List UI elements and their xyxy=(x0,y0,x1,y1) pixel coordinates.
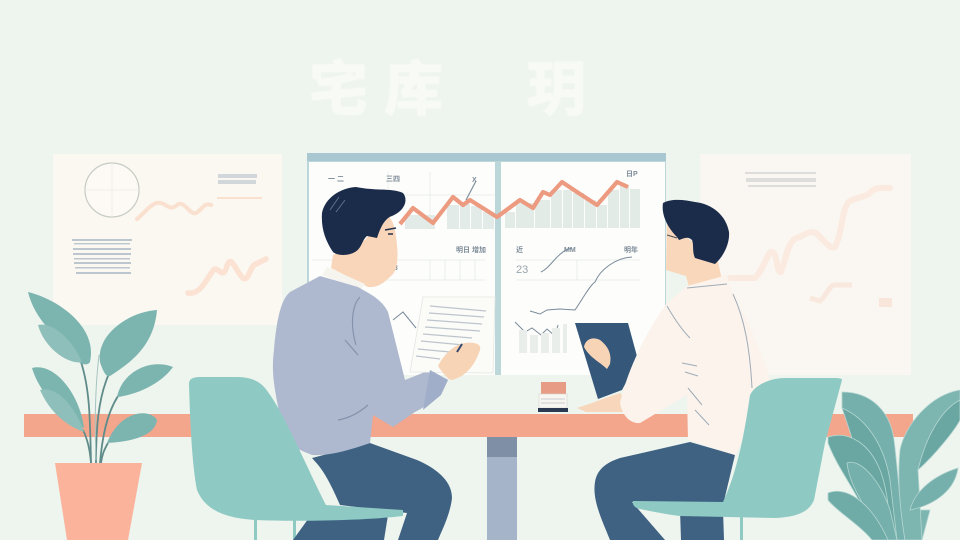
dark line chart left screen xyxy=(393,312,416,328)
trousers xyxy=(594,442,735,540)
torso and arm xyxy=(273,276,448,455)
plant right xyxy=(828,390,960,540)
small chart labels: 28 xyxy=(390,265,398,272)
ear xyxy=(687,240,693,256)
neck and face xyxy=(666,222,722,290)
small chart labels: MM xyxy=(564,247,576,254)
panel: left wall chart xyxy=(53,154,282,325)
screen: left xyxy=(309,162,495,375)
line chart xyxy=(730,188,890,278)
title: 库 xyxy=(384,57,443,123)
chair leg xyxy=(740,516,743,540)
line chart upper xyxy=(137,203,211,219)
small chart labels: 近 xyxy=(516,245,523,254)
leaves xyxy=(28,292,173,443)
text lines block xyxy=(72,239,132,274)
small chart labels: 23 xyxy=(516,264,528,276)
hand over document xyxy=(438,343,480,380)
legend lines upper right xyxy=(217,174,262,199)
far leg xyxy=(293,515,388,540)
small chart labels: X xyxy=(472,177,477,184)
small chart labels: 一 二 xyxy=(328,176,344,183)
hand on tablet xyxy=(584,338,611,369)
glasses xyxy=(667,235,677,238)
small chart labels: 三四 xyxy=(386,175,400,183)
document held by man left xyxy=(410,297,495,380)
marker line to label xyxy=(466,181,476,200)
far leg xyxy=(680,510,724,540)
neck and face xyxy=(331,215,397,287)
small line chart xyxy=(810,285,852,301)
title: 玥 xyxy=(527,57,586,123)
bar chart right xyxy=(505,186,640,228)
man left xyxy=(273,187,452,540)
faint bars lower right screen xyxy=(519,324,567,353)
desk top xyxy=(24,414,913,437)
document text lines xyxy=(416,306,486,359)
title xyxy=(309,57,586,123)
small legend box xyxy=(879,298,892,307)
title: 宅 xyxy=(309,57,368,123)
hair xyxy=(322,187,405,255)
small chart labels: 明年 xyxy=(624,245,638,254)
line chart lower xyxy=(188,259,266,293)
screen: right xyxy=(501,162,665,375)
hair xyxy=(663,200,729,264)
hair highlight xyxy=(330,197,345,212)
shirt xyxy=(620,275,772,455)
shirt fold xyxy=(338,297,368,420)
chair right xyxy=(633,378,842,540)
man right xyxy=(577,200,772,540)
eye and brow xyxy=(385,228,396,234)
text lines xyxy=(745,172,816,187)
trousers xyxy=(312,443,452,540)
stems xyxy=(81,355,118,463)
desk pedestal xyxy=(487,437,517,540)
sleeve cuff xyxy=(423,370,448,410)
pot left xyxy=(55,463,142,540)
forearm xyxy=(577,393,635,412)
shirt folds xyxy=(667,284,752,425)
small desk item xyxy=(538,382,568,412)
shirt collar xyxy=(322,267,365,290)
red trend line xyxy=(400,182,628,224)
small chart labels: 日P xyxy=(626,170,638,178)
plant left xyxy=(28,292,173,463)
tablet xyxy=(575,323,638,399)
dark line charts right screen xyxy=(515,248,632,336)
leaves right plant xyxy=(828,390,960,540)
pie chart circle xyxy=(85,163,139,217)
small chart labels: 明日 增加 xyxy=(456,245,486,254)
pen xyxy=(457,344,462,352)
small chart labels xyxy=(328,170,638,276)
stem right plant xyxy=(895,510,930,540)
chair left legs xyxy=(254,518,296,540)
chart grid lines xyxy=(312,172,640,280)
chair back and seat xyxy=(633,378,842,518)
chair left xyxy=(189,377,403,521)
bar chart left xyxy=(405,204,494,229)
panel: right wall chart xyxy=(700,154,911,375)
panel: central monitor xyxy=(307,153,666,375)
